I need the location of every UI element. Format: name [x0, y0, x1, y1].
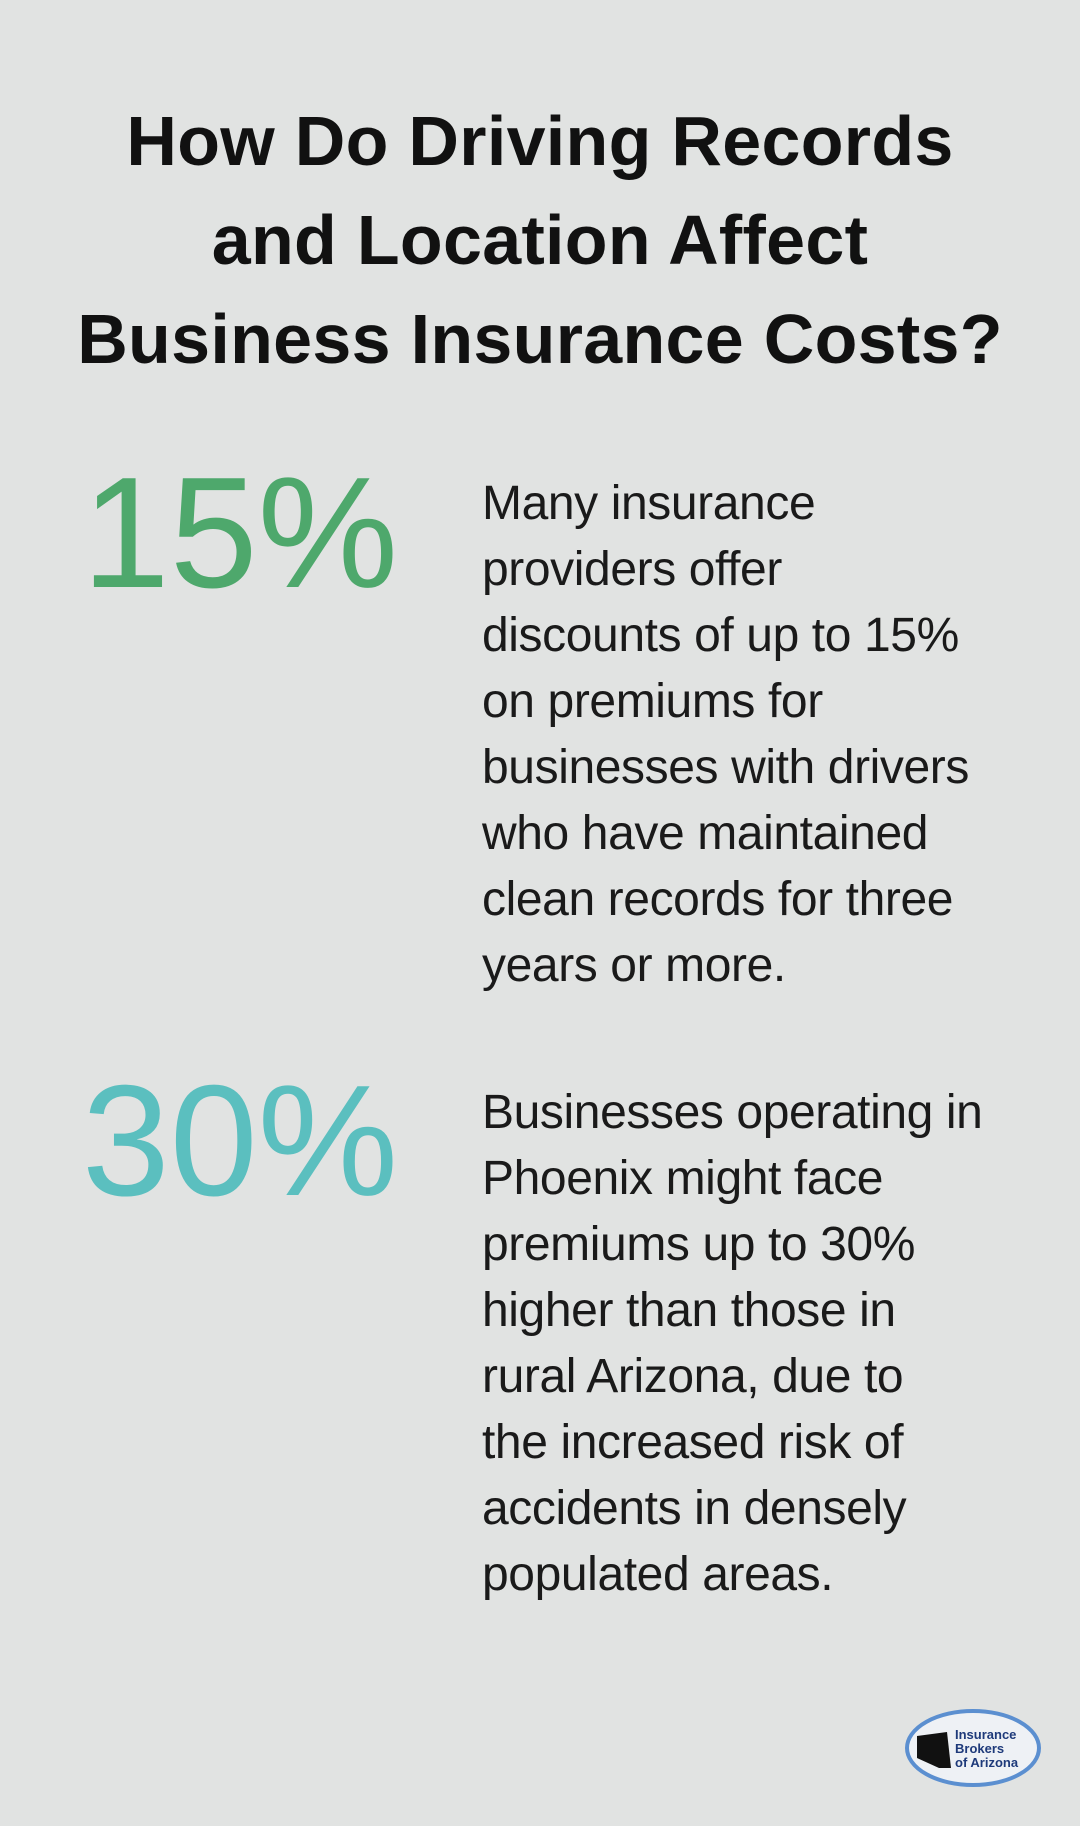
text: 15% description — [482, 477, 969, 992]
text: 15% description: Many insurance — [482, 477, 815, 530]
text: 30% description: Phoenix might face — [482, 1152, 883, 1205]
text: 15% description: providers offer — [482, 543, 782, 596]
text: 15% description: on premiums for — [482, 675, 823, 728]
title — [77, 102, 1003, 378]
text: 30% description: premiums up to 30% — [482, 1218, 915, 1271]
logo: Insurance Brokers of Arizona: Insurance — [955, 1727, 1016, 1742]
title: and Location Affect — [212, 201, 868, 279]
title: Business Insurance Costs? — [77, 300, 1003, 378]
text: 30% description: the increased risk of — [482, 1416, 903, 1469]
text: 30% description: higher than those in — [482, 1284, 896, 1337]
text: 15% description: businesses with drivers — [482, 741, 969, 794]
stat: 15%: 15% — [82, 445, 398, 621]
title: How Do Driving Records — [126, 102, 954, 180]
logo: Insurance Brokers of Arizona: of Arizona — [955, 1755, 1019, 1770]
logo: Insurance Brokers of Arizona — [905, 1709, 1041, 1787]
text: 30% description: accidents in densely — [482, 1482, 906, 1535]
text: 30% description: rural Arizona, due to — [482, 1350, 903, 1403]
text: 15% description: discounts of up to 15% — [482, 609, 959, 662]
text: 15% description: clean records for three — [482, 873, 953, 926]
text: 30% description: populated areas. — [482, 1548, 833, 1601]
text: 30% description: Businesses operating in — [482, 1086, 982, 1139]
text: 15% description: who have maintained — [482, 807, 928, 860]
logo: Insurance Brokers of Arizona: Brokers — [955, 1741, 1004, 1756]
text: 30% description — [482, 1086, 982, 1601]
stat: 30%: 30% — [82, 1053, 398, 1229]
text: 15% description: years or more. — [482, 939, 786, 992]
